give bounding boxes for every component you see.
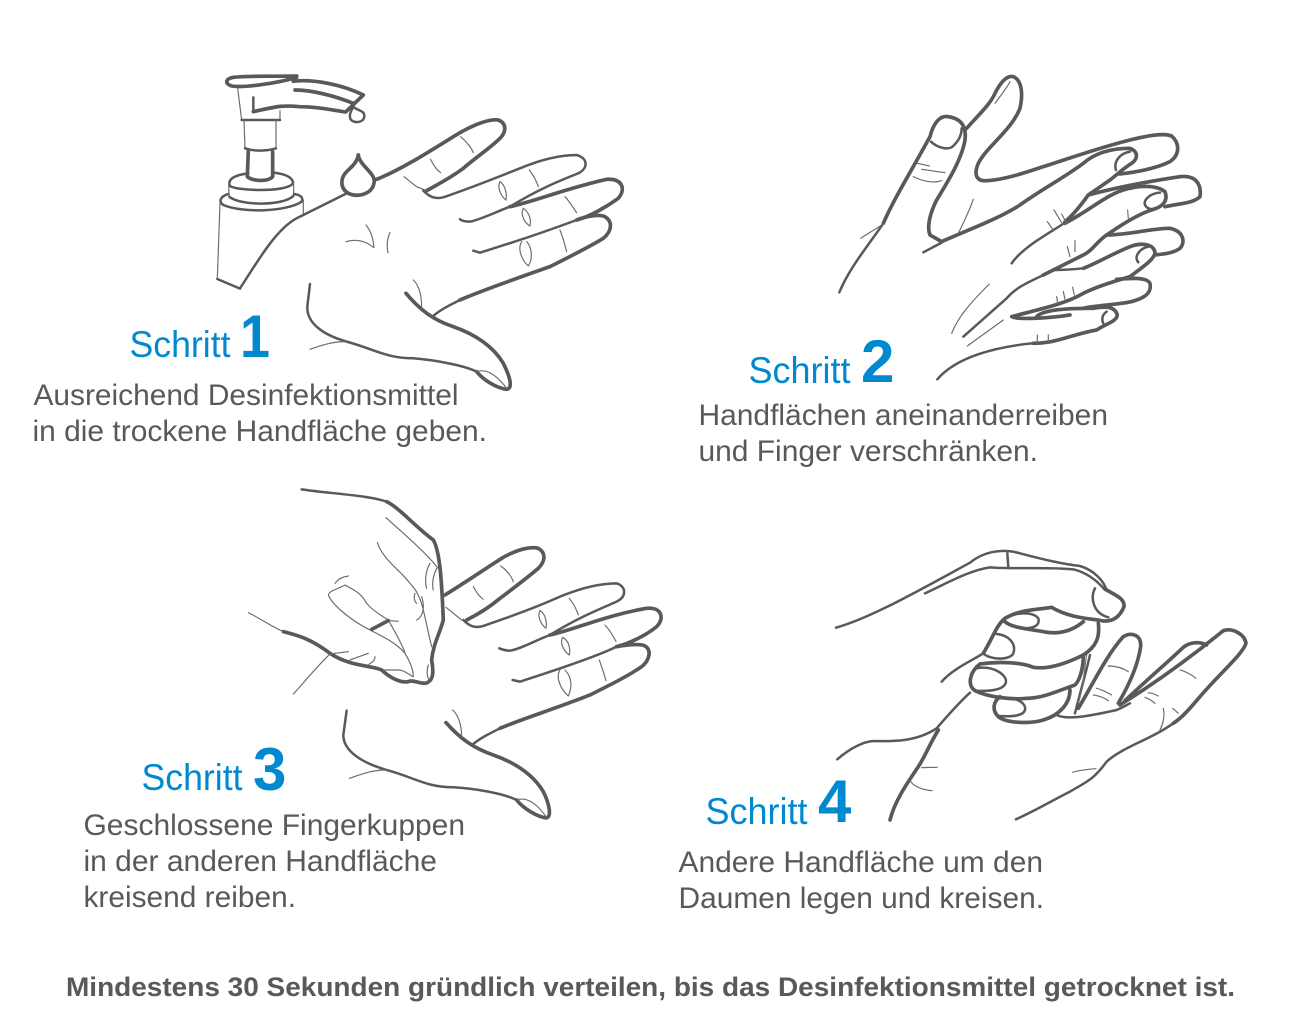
- text: step 3: kreisend reiben.: [84, 881, 296, 914]
- heading: Schritt 4: [706, 768, 852, 835]
- open hand: [343, 548, 661, 818]
- illustration: thumb rubbing: [836, 551, 1246, 820]
- text: step 4: Andere Handfläche um den: [678, 846, 1043, 879]
- text: step 3: Geschlossene Fingerkuppen: [84, 809, 465, 842]
- icon: small droplet: [350, 107, 364, 122]
- icon: large droplet: [342, 155, 374, 195]
- heading: Schritt 3: 3: [253, 736, 286, 803]
- heading: Schritt 3: Schritt: [142, 757, 243, 798]
- rubbing hand: [248, 489, 443, 694]
- illustration: interlaced hands: [839, 76, 1200, 379]
- heading: Schritt 1: 1: [240, 303, 270, 370]
- text: step 2: und Finger verschränken.: [698, 435, 1038, 468]
- text: step 3: [84, 809, 465, 914]
- text: step 1: in die trockene Handfläche geben.: [32, 415, 487, 448]
- text: step 2: Handflächen aneinanderreiben: [698, 399, 1108, 432]
- icon: soap pump: [217, 76, 363, 289]
- text: step 1: Ausreichend Desinfektionsmittel: [34, 379, 458, 412]
- heading: Schritt 2: [748, 328, 894, 395]
- text: step 1: [32, 379, 487, 448]
- heading: Schritt 1: [130, 303, 270, 370]
- text: step 3: in der anderen Handfläche: [84, 845, 437, 878]
- hand outline: [240, 120, 622, 389]
- heading: Schritt 2: Schritt: [748, 350, 851, 391]
- footer note: Mindestens 30 Sekunden gründlich verteilen, bis das Desinfektionsmittel getrocknet ist.: [66, 972, 1235, 1002]
- heading: Schritt 1: Schritt: [130, 324, 231, 365]
- text: step 2: [698, 399, 1108, 468]
- illustration: pump dispenser and open hand: [217, 76, 622, 389]
- text: step 4: [678, 846, 1044, 915]
- heading: Schritt 4: 4: [818, 768, 852, 835]
- illustration: fingertips rubbing in palm: [248, 489, 661, 818]
- text: step 4: Daumen legen und kreisen.: [678, 882, 1044, 915]
- heading: Schritt 2: 2: [861, 328, 894, 395]
- heading: Schritt 3: [142, 736, 286, 803]
- heading: Schritt 4: Schritt: [706, 791, 808, 832]
